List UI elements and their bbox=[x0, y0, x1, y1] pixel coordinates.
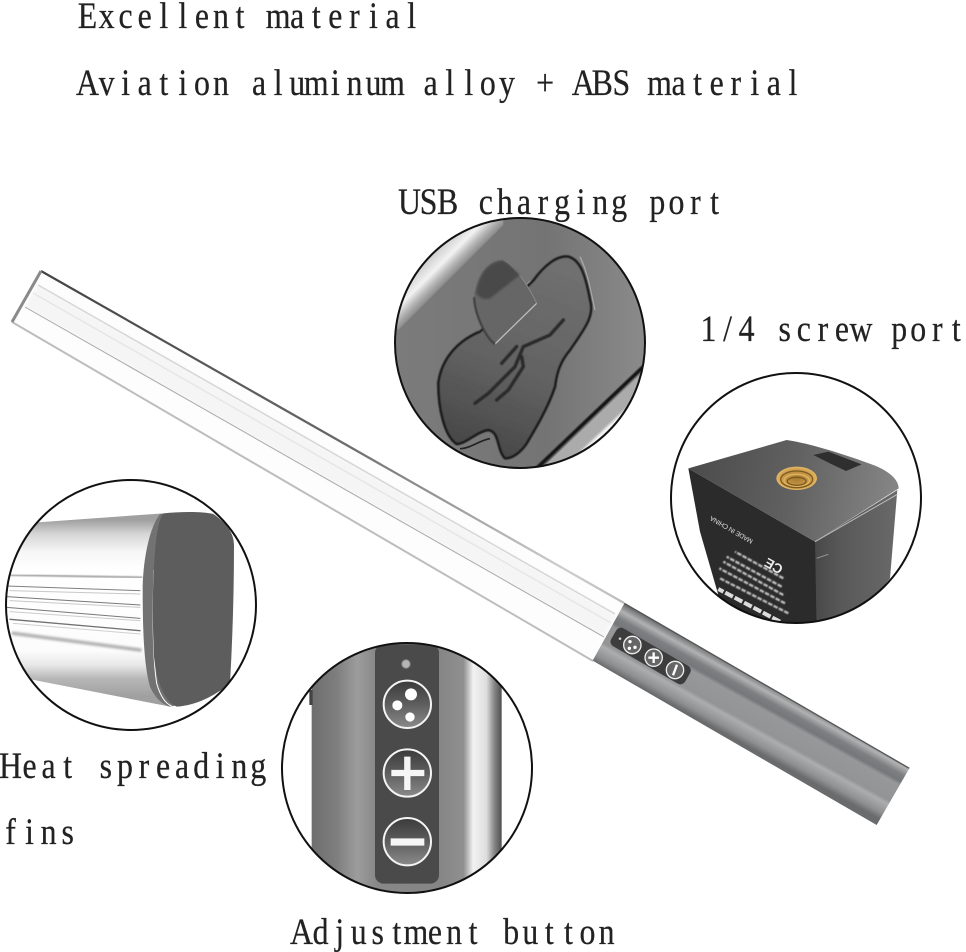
end cap face bbox=[153, 512, 234, 707]
switch notch bbox=[813, 452, 862, 471]
left dark label face bbox=[688, 468, 817, 632]
left dark label face: CE bbox=[762, 555, 785, 577]
callout label continuation: fins: fins bbox=[5, 812, 74, 853]
aluminium handle bbox=[593, 603, 909, 825]
top face bbox=[688, 440, 899, 542]
callout label: heat spreading fins: Heat spreading bbox=[0, 746, 266, 787]
indicator LED bbox=[402, 660, 410, 668]
callout label: USB charging port: USB charging port bbox=[398, 182, 719, 223]
translucent tube bbox=[12, 271, 624, 661]
left dark label face: MADE IN CHINA bbox=[709, 514, 754, 544]
light wand product bbox=[12, 271, 909, 825]
subheading: material description: Aviation aluminum alloy + ABS material bbox=[76, 63, 797, 104]
brass screw thread bbox=[776, 467, 817, 490]
callout circle: 1/4 screw port close-up bbox=[671, 373, 921, 632]
minus button bbox=[384, 818, 431, 865]
callout circle: USB charging port close-up bbox=[394, 217, 646, 469]
metal rim bbox=[142, 514, 175, 707]
callout circle: heat spreading fins close-up bbox=[0, 480, 256, 730]
embossed USB symbol bbox=[475, 320, 563, 403]
callout label: 1/4 screw port: 1/4 screw port bbox=[701, 309, 961, 350]
charging port cover tab bbox=[474, 260, 537, 344]
right face bbox=[815, 490, 897, 632]
USB recess bbox=[438, 257, 595, 458]
finned body bbox=[0, 513, 170, 707]
handle button panel bbox=[609, 626, 693, 686]
callout label: adjustment button: Adjustment button bbox=[290, 912, 615, 952]
plus button bbox=[384, 749, 431, 797]
button panel bbox=[375, 644, 439, 884]
mode button bbox=[384, 681, 431, 728]
callout circle: adjustment button close-up bbox=[282, 635, 532, 905]
handle body bbox=[312, 635, 502, 905]
